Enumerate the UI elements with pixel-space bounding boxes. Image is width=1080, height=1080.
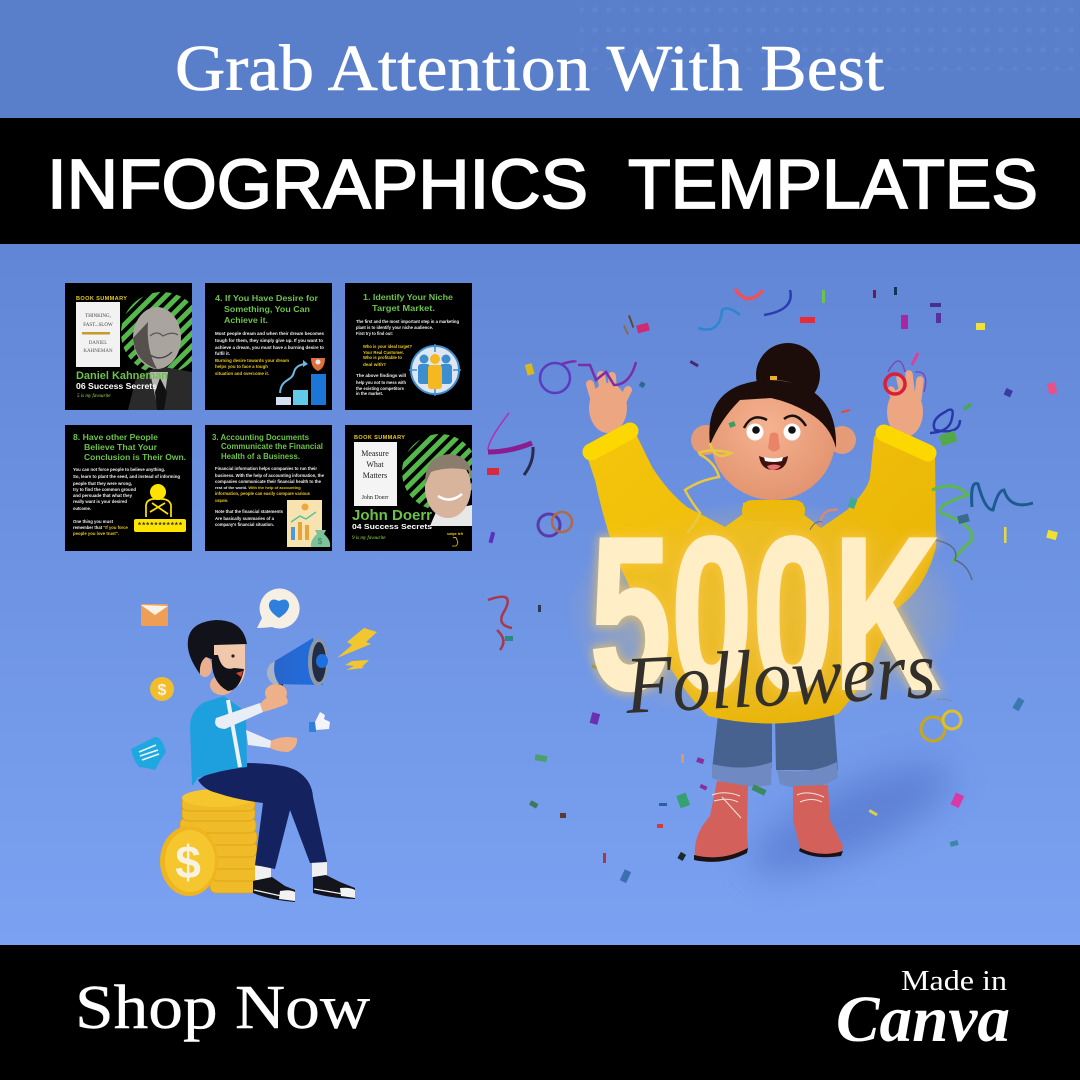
panel: desire card: helps you to face a tough [215, 364, 268, 369]
panel: accounting card: 3. Accounting Documents [212, 432, 309, 442]
panel: conclusion card: You can not force people to believe anything. [73, 467, 165, 472]
icon: lightning bolts [337, 628, 377, 670]
panel: niche target card: in the market. [356, 391, 383, 396]
panel: accounting card: Communicate the Financial [221, 441, 323, 451]
icon: envelope [141, 604, 168, 626]
panel: desire card: Burning desire towards your dream [215, 358, 289, 363]
sweater [585, 426, 936, 724]
panel: conclusion card: outcome. [73, 506, 91, 511]
panel: conclusion card: Conclusion is Their Own. [84, 452, 186, 462]
title band [0, 118, 1080, 244]
panel: niche target card: the existing competitors [356, 386, 405, 391]
head [691, 380, 856, 500]
panel: accounting card: companies communicate their financial health to the [215, 479, 322, 484]
panel: accounting card: Note that the financial statements [215, 509, 284, 514]
panel: niche target card: The first and the most important step in a marketing [356, 319, 459, 324]
bun [756, 343, 820, 407]
panel: John Doerr card: John Doerr [362, 495, 388, 501]
icon: target audience [409, 344, 461, 396]
panel: John Doerr card: BOOK SUMMARY [354, 435, 405, 441]
panel: John Doerr card: Matters [363, 471, 387, 480]
heading: infographics templates [47, 145, 1038, 223]
panel: Daniel Kahneman card: BOOK SUMMARY [76, 296, 127, 302]
socks [255, 862, 327, 880]
panel: Daniel Kahneman card [65, 283, 203, 410]
panel: conclusion card: and persuade that what they [73, 493, 133, 498]
panel: conclusion card: So, learn to plant the seed, and instead of informing [73, 474, 180, 479]
panel: conclusion card: Believe That Your [84, 442, 158, 452]
label: Followers: Followers [622, 624, 938, 731]
panel: niche target card: The above findings will [356, 373, 406, 378]
panel: conclusion card [65, 425, 192, 551]
panel: desire card: achieve a dream, you must have a burning desire to [215, 345, 324, 350]
call to action: Shop Now [75, 974, 370, 1042]
panel: accounting card: Are basically summaries of a [215, 516, 275, 521]
shirt placket and sleeves [215, 694, 297, 767]
panel: desire card: Most people dream and when their dream becomes [215, 331, 325, 336]
panel: conclusion card: 8. Have other People [73, 432, 158, 442]
panel: niche target card: plant is to identify your niche audience. [356, 325, 433, 330]
panel: John Doerr card: Measure [361, 449, 389, 458]
panel: conclusion card: One thing you must [73, 519, 114, 524]
panel: niche target card: First try to find out: [356, 331, 393, 336]
coin stack: $ [175, 836, 201, 888]
panel: John Doerr card: swipe left [447, 532, 464, 536]
panel: conclusion card: try to find the common ground [73, 487, 136, 492]
heading: infographics templates: TEMPLATES [628, 145, 1038, 223]
panel: niche target card: Your Real Customer. [363, 350, 404, 355]
panel: niche target card [345, 283, 472, 410]
panel: Daniel Kahneman card: 5 is my favourite [77, 394, 111, 399]
panel: niche target card: help you not to mess with [356, 380, 406, 385]
head [188, 620, 247, 695]
illustration: man with megaphone on coins [131, 589, 377, 902]
illustration: floor shadow [737, 745, 963, 895]
panel: accounting card: rest of the world. With the help of accounting [215, 485, 301, 490]
panel: accounting card: companies. [215, 498, 228, 503]
confetti [487, 287, 1058, 883]
illustration: woman in yellow sweater [565, 343, 965, 862]
background [0, 244, 1080, 945]
panel: John Doerr card: What [366, 460, 384, 469]
panel: niche target card: deal with? [363, 362, 386, 367]
shirt [190, 696, 247, 786]
hands [589, 374, 923, 437]
icon: person at desk: *********** [138, 521, 183, 530]
panel: niche target card: Who is your ideal target? [363, 344, 412, 349]
panel: John Doerr card: 9 is my favourite [352, 536, 386, 541]
panel: Daniel Kahneman card: FAST...SLOW [83, 323, 113, 328]
panel: accounting card [205, 425, 332, 551]
panel: accounting card: information, people can easily compare various [215, 491, 311, 496]
boots [694, 781, 843, 862]
panel: desire card: 4. If You Have Desire for [215, 293, 319, 303]
panel: John Doerr card [345, 425, 478, 551]
sweater cuffs and neck [591, 431, 928, 521]
panel: conclusion card: people that they were wrong, [73, 481, 132, 486]
panel: John Doerr card: 04 Success Secrets [352, 522, 432, 531]
panel: accounting card: company's financial situation. [215, 522, 274, 527]
icon: dollar coin small [150, 677, 174, 701]
icon: chat bubble [131, 737, 166, 770]
panel: desire card: Something, You Can [224, 304, 310, 314]
panel: conclusion card: remember that "If you force [73, 525, 128, 530]
panel: conclusion card: really want is your desired [73, 499, 127, 504]
panel: desire card: fulfil it. [215, 351, 230, 356]
icon: finance chart and money bag: $ [318, 537, 323, 546]
icon: heart speech bubble [257, 589, 300, 629]
panel: accounting card: Financial information helps companies to run their [215, 466, 317, 471]
megaphone [265, 638, 328, 702]
panel: niche target card: 1. Identify Your Niche [363, 292, 453, 302]
panel: Daniel Kahneman card: KAHNEMAN [83, 349, 113, 354]
shoes [253, 875, 355, 902]
panel: John Doerr card: John Doerr [352, 507, 432, 524]
Made in Canva logo: Made in [901, 966, 1007, 997]
shorts [712, 715, 838, 788]
top banner [0, 0, 1080, 118]
panel: accounting card: Health of a Business. [221, 451, 300, 461]
panel: niche target card: Who is profitable to [363, 355, 402, 360]
footer band [0, 945, 1080, 1080]
panel: Daniel Kahneman card: Daniel Kahneman [76, 370, 168, 382]
heading: infographics templates: INFOGRAPHICS [47, 145, 588, 223]
panel: desire card: Achieve it. [224, 315, 268, 325]
panel: desire card [205, 283, 332, 410]
panel: desire card: tough for them, they simply give up. If you want to [215, 338, 323, 343]
title line: Grab Attention With Best [175, 32, 884, 105]
icon: growth bars and trophy [276, 358, 326, 405]
panel: desire card: situation and overcome it. [215, 371, 269, 376]
trousers [198, 763, 327, 869]
panel: Daniel Kahneman card: DANIEL [89, 341, 107, 346]
panel: niche target card: Target Market. [372, 303, 435, 313]
glow behind number [565, 500, 965, 724]
coin stack [160, 789, 258, 896]
icon: dollar coin small: $ [158, 682, 167, 699]
panel: accounting card: business. With the help of accounting information, the [215, 473, 325, 478]
Made in Canva logo: Canva [836, 983, 1010, 1056]
panel: Daniel Kahneman card: THINKING, [85, 314, 111, 319]
panel: Daniel Kahneman card: 06 Success Secrets [76, 382, 158, 391]
icon: thumbs up [309, 712, 330, 732]
panel: conclusion card: people you love trust". [73, 531, 119, 536]
